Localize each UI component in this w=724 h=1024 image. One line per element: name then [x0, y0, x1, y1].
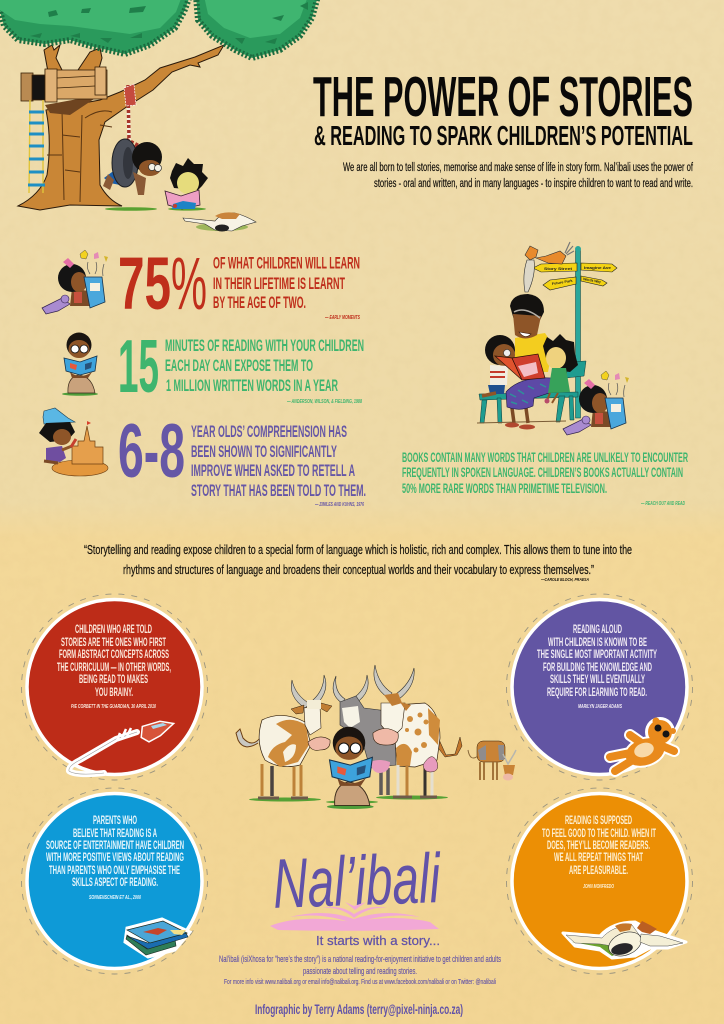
icon: boy reading on rock — [62, 332, 98, 396]
panel: blue circle, parents' attitudes: SONNENSCHEIN ET AL., 2000 — [89, 895, 141, 901]
signpost: Future Park — [552, 279, 573, 286]
panel: orange circle, reading feels good: READING IS SUPPOSED — [565, 813, 632, 827]
panel: blue circle, parents' attitudes: SKILLS ASPECT OF READING. — [72, 875, 158, 889]
stat: 15 minutes: — ANDERSON, WILSON, & FIELDING, 1988 — [286, 399, 362, 405]
panel: orange circle, reading feels good: ARE PLEASURABLE. — [569, 863, 628, 877]
stat: 6-8 year olds: IMPROVE WHEN ASKED TO RETELL A — [191, 462, 355, 480]
stat: 15 minutes: 1 MILLION WRITTEN WORDS IN A YEAR — [166, 377, 338, 395]
boy reading on rock — [327, 727, 374, 809]
panel: purple circle, reading aloud — [506, 594, 692, 780]
panel: red circle, abstract concepts: PIE CORBETT IN THE GUARDIAN, 30 APRIL 2010 — [71, 704, 156, 710]
stat: 75% — [118, 242, 360, 325]
quote: storytelling and reading: —CAROLE BLOCH, PRAESA — [540, 577, 589, 583]
stat: 75%: IN THEIR LIFETIME IS LEARNT — [213, 275, 345, 293]
panel: red circle, abstract concepts — [22, 594, 208, 780]
panel: blue circle, parents' attitudes: THAN PARENTS WHO ONLY EMPHASISE THE — [49, 863, 180, 877]
icon: child building sandcastle — [39, 408, 108, 476]
sleeping dog — [183, 212, 256, 232]
about text: Nal’ibali (isiXhosa for “here’s the story”) is a national reading-for-enjoyment initiative to get children and adults — [219, 954, 501, 964]
icon: stack of books — [125, 919, 190, 957]
about text: passionate about telling and reading stories. — [303, 966, 417, 976]
tree canopy, left lobe — [0, 0, 190, 54]
icon: girl reading with toy — [42, 250, 108, 314]
panel: purple circle, reading aloud: READING ALOUD — [573, 622, 622, 636]
stat: 75%: — EARLY MOMENTS — [324, 315, 360, 321]
illustration: grandmother reading on bench beneath signpost — [477, 242, 629, 435]
rope ladder — [28, 100, 45, 193]
stat: 15 minutes — [118, 324, 364, 408]
about text — [219, 954, 501, 986]
text: books contain many rare words: — REACH OUT AND READ — [640, 501, 685, 507]
grass under tree — [105, 207, 157, 211]
tree canopy, right lobe — [196, 0, 318, 58]
stat: 75%: 75 — [118, 242, 171, 325]
stat: 75%: % — [171, 242, 207, 325]
grey cow behind — [333, 675, 396, 795]
stat: 15 minutes: MINUTES OF READING WITH YOUR CHILDREN — [165, 337, 364, 355]
panel: orange circle, reading feels good: JOHN MONFREDO — [583, 884, 614, 890]
panel: red circle, abstract concepts: CHILDREN WHO ARE TOLD — [75, 622, 152, 636]
tree trunk and branches — [18, 45, 224, 210]
panel: orange circle, reading feels good — [506, 788, 692, 974]
signpost — [533, 246, 617, 418]
illustration: treehouse, tyre swing and children — [0, 0, 318, 232]
small distant cow — [468, 741, 516, 780]
intro paragraph — [343, 162, 694, 190]
stat: 6-8 year olds: — ZIMILES AND KUHNS, 1976 — [314, 502, 364, 508]
text: books contain many rare words — [402, 450, 688, 507]
panel: red circle, abstract concepts: FORM ABSTRACT CONCEPTS ACROSS — [59, 647, 169, 661]
stat: 75%: OF WHAT CHILDREN WILL LEARN — [213, 254, 360, 272]
girl in green dress — [543, 334, 578, 404]
panel: red circle, abstract concepts: YOU BRAINY. — [95, 685, 133, 699]
left cow — [236, 675, 332, 798]
icon: teddy bear — [610, 717, 676, 773]
grass — [249, 796, 448, 804]
signpost: Imagine Ave — [584, 266, 611, 270]
panel: red circle, abstract concepts: BEING READ TO MAKES — [79, 672, 148, 686]
boy beside grandmother — [482, 335, 515, 396]
stat: 6-8 year olds: STORY THAT HAS BEEN TOLD TO THEM. — [191, 482, 366, 500]
panel: blue circle, parents' attitudes: WITH MORE POSITIVE VIEWS ABOUT READING — [46, 850, 184, 864]
panel: blue circle, parents' attitudes — [22, 788, 208, 974]
girl reading with toy — [563, 371, 629, 435]
stat: 6-8 year olds: 6-8 — [118, 409, 185, 494]
signpost: Story Street — [544, 267, 573, 271]
illustration: cows with boy reading — [236, 665, 516, 809]
signpost: Words Way — [583, 277, 601, 284]
panel: blue circle, parents' attitudes: PARENTS WHO — [93, 813, 137, 827]
child reading a pink book — [165, 158, 208, 211]
quote: storytelling and reading — [84, 542, 632, 583]
about text: For more info visit www.nalibali.org or email info@nalibali.org. Find us at www.facebook.com/nalibali or on Twitter: @nalibali — [224, 977, 496, 986]
panel: red circle, abstract concepts: THE CURRICULUM — IN OTHER WORDS, — [57, 660, 171, 674]
stat: 6-8 year olds: YEAR OLDS’ COMPREHENSION HAS — [191, 423, 347, 441]
open red book — [495, 354, 545, 380]
panel: red circle, abstract concepts: STORIES ARE THE ONES WHO FIRST — [61, 635, 166, 649]
right cow — [373, 665, 462, 797]
icon: sleeping dog sticker — [563, 921, 686, 961]
panel: blue circle, parents' attitudes: BELIEVE THAT READING IS A — [73, 826, 157, 840]
panel: blue circle, parents' attitudes: SOURCE OF ENTERTAINMENT HAVE CHILDREN — [46, 838, 184, 852]
tagline: It starts with a story... — [316, 933, 440, 948]
panel: purple circle, reading aloud: MARILYN JAGER ADAMS — [578, 704, 622, 710]
bench — [479, 361, 586, 423]
treehouse — [21, 67, 107, 102]
logo: Nal'ibali with open book — [270, 839, 443, 931]
stat: 15 minutes: 15 — [118, 324, 159, 408]
stat: 6-8 year olds: BEEN SHOWN TO SIGNIFICANTLY — [191, 443, 337, 461]
icon: paper plane streak — [69, 722, 172, 774]
grandmother — [505, 294, 553, 430]
stat: 15 minutes: EACH DAY CAN EXPOSE THEM TO — [165, 357, 313, 375]
logo wordmark: Nal’ibali — [272, 839, 443, 923]
icon: open pink book — [270, 902, 439, 931]
tyre swing — [103, 84, 162, 195]
stat: 75%: BY THE AGE OF TWO. — [213, 294, 306, 312]
credit: Infographic by Terry Adams (terry@pixel-ninja.co.za) — [255, 1001, 463, 1017]
stat: 6-8 year olds — [118, 409, 366, 508]
orange bird with feather — [524, 242, 574, 292]
